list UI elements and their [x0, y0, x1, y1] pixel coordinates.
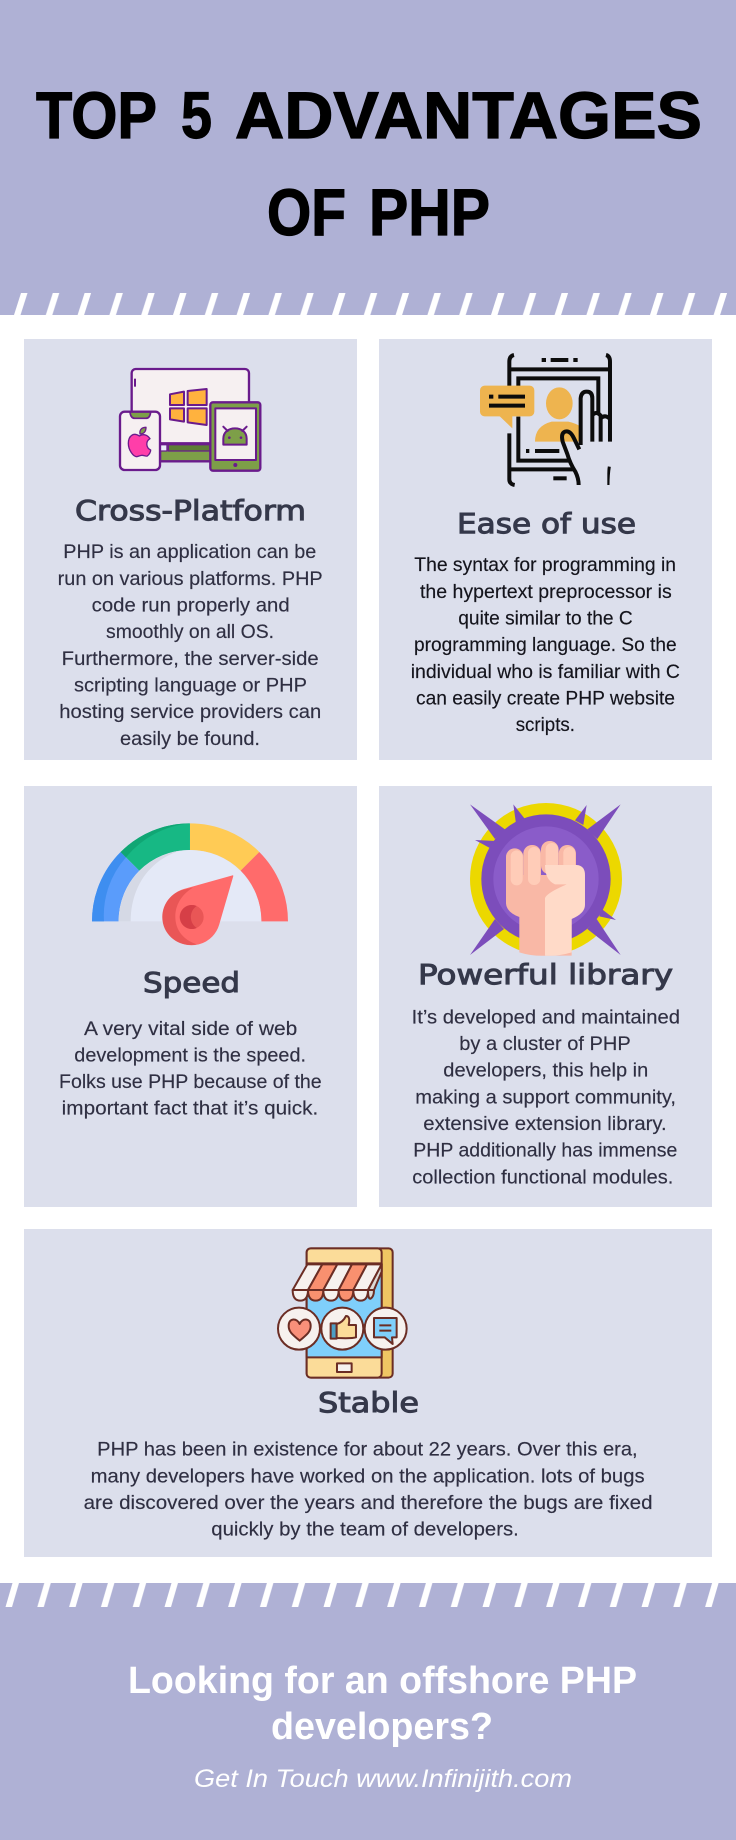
footer heading: Looking for an offshore PHP: [128, 1660, 637, 1702]
text: cross-platform description: smoothly on all OS.: [106, 621, 274, 643]
text: cross-platform description: easily be found.: [120, 728, 260, 750]
icon: phone with chat bubble and hand: [480, 355, 610, 485]
footer contact line: Get In Touch www.Infinijith.com: [194, 1765, 572, 1793]
heading: Speed: Speed: [143, 966, 240, 999]
text: ease of use description: individual who is familiar with C: [411, 661, 680, 683]
text: speed description: important fact that it’s quick.: [62, 1098, 318, 1120]
icon: mobile store: [278, 1248, 407, 1378]
heading: Ease of use: Ease of use: [457, 507, 636, 540]
panel: stable: [24, 1229, 712, 1557]
title: [36, 78, 702, 249]
text: stable description: PHP has been in existence for about 22 years. Over this era,: [97, 1439, 638, 1461]
header band: [0, 0, 736, 315]
footer band: [0, 1583, 736, 1840]
text: cross-platform description: PHP is an application can be: [63, 541, 316, 563]
text: stable description: many developers have worked on the application. lots of bugs: [91, 1465, 645, 1487]
text: cross-platform description: Furthermore, the server-side: [62, 648, 319, 670]
text: powerful library description: by a cluster of PHP: [459, 1033, 631, 1055]
text: ease of use description: the hypertext preprocessor is: [420, 581, 672, 603]
text: ease of use description: The syntax for programming in: [414, 554, 676, 576]
icon: devices: [120, 369, 260, 471]
text: stable description: [84, 1439, 653, 1541]
title: TOP: [36, 78, 157, 152]
icon: speedometer: [92, 823, 288, 945]
text: cross-platform description: run on various platforms. PHP: [58, 568, 323, 590]
panel: speed: [24, 786, 357, 1207]
footer heading: [128, 1660, 637, 1748]
text: stable description: are discovered over the years and therefore the bugs are fixed: [84, 1492, 653, 1514]
text: ease of use description: [411, 554, 680, 736]
text: powerful library description: making a support community,: [415, 1086, 676, 1108]
panel: cross-platform: [24, 339, 357, 760]
text: speed description: [59, 1018, 322, 1120]
heading: Stable: Stable: [318, 1386, 419, 1419]
panel: powerful library: [379, 786, 712, 1207]
text: ease of use description: scripts.: [516, 714, 575, 736]
text: ease of use description: programming language. So the: [414, 634, 677, 656]
text: powerful library description: It’s developed and maintained: [412, 1006, 680, 1028]
icon: raised fist: [470, 803, 622, 956]
heading: Cross-Platform: Cross-Platform: [75, 494, 306, 527]
text: speed description: A very vital side of web: [84, 1018, 297, 1040]
text: powerful library description: [412, 1006, 680, 1188]
text: ease of use description: can easily create PHP website: [416, 688, 675, 710]
text: ease of use description: quite similar to the C: [458, 608, 633, 630]
text: powerful library description: collection functional modules.: [412, 1166, 673, 1188]
title: ADVANTAGES: [235, 78, 702, 152]
text: cross-platform description: scripting language or PHP: [74, 674, 307, 696]
text: cross-platform description: code run properly and: [92, 594, 290, 616]
panel: ease of use: [379, 339, 712, 760]
text: powerful library description: PHP additionally has immense: [413, 1140, 677, 1162]
text: cross-platform description: hosting service providers can: [59, 701, 321, 723]
title: 5: [181, 78, 212, 152]
text: powerful library description: extensive extension library.: [423, 1113, 667, 1135]
footer heading: developers?: [271, 1706, 493, 1748]
text: speed description: development is the speed.: [74, 1045, 306, 1067]
text: powerful library description: developers, this help in: [443, 1060, 648, 1082]
text: stable description: quickly by the team of developers.: [211, 1519, 519, 1541]
title: OF: [267, 175, 346, 249]
heading: Powerful library: Powerful library: [418, 958, 673, 991]
text: cross-platform description: [58, 541, 323, 750]
text: speed description: Folks use PHP because of the: [59, 1071, 322, 1093]
title: PHP: [369, 175, 490, 249]
